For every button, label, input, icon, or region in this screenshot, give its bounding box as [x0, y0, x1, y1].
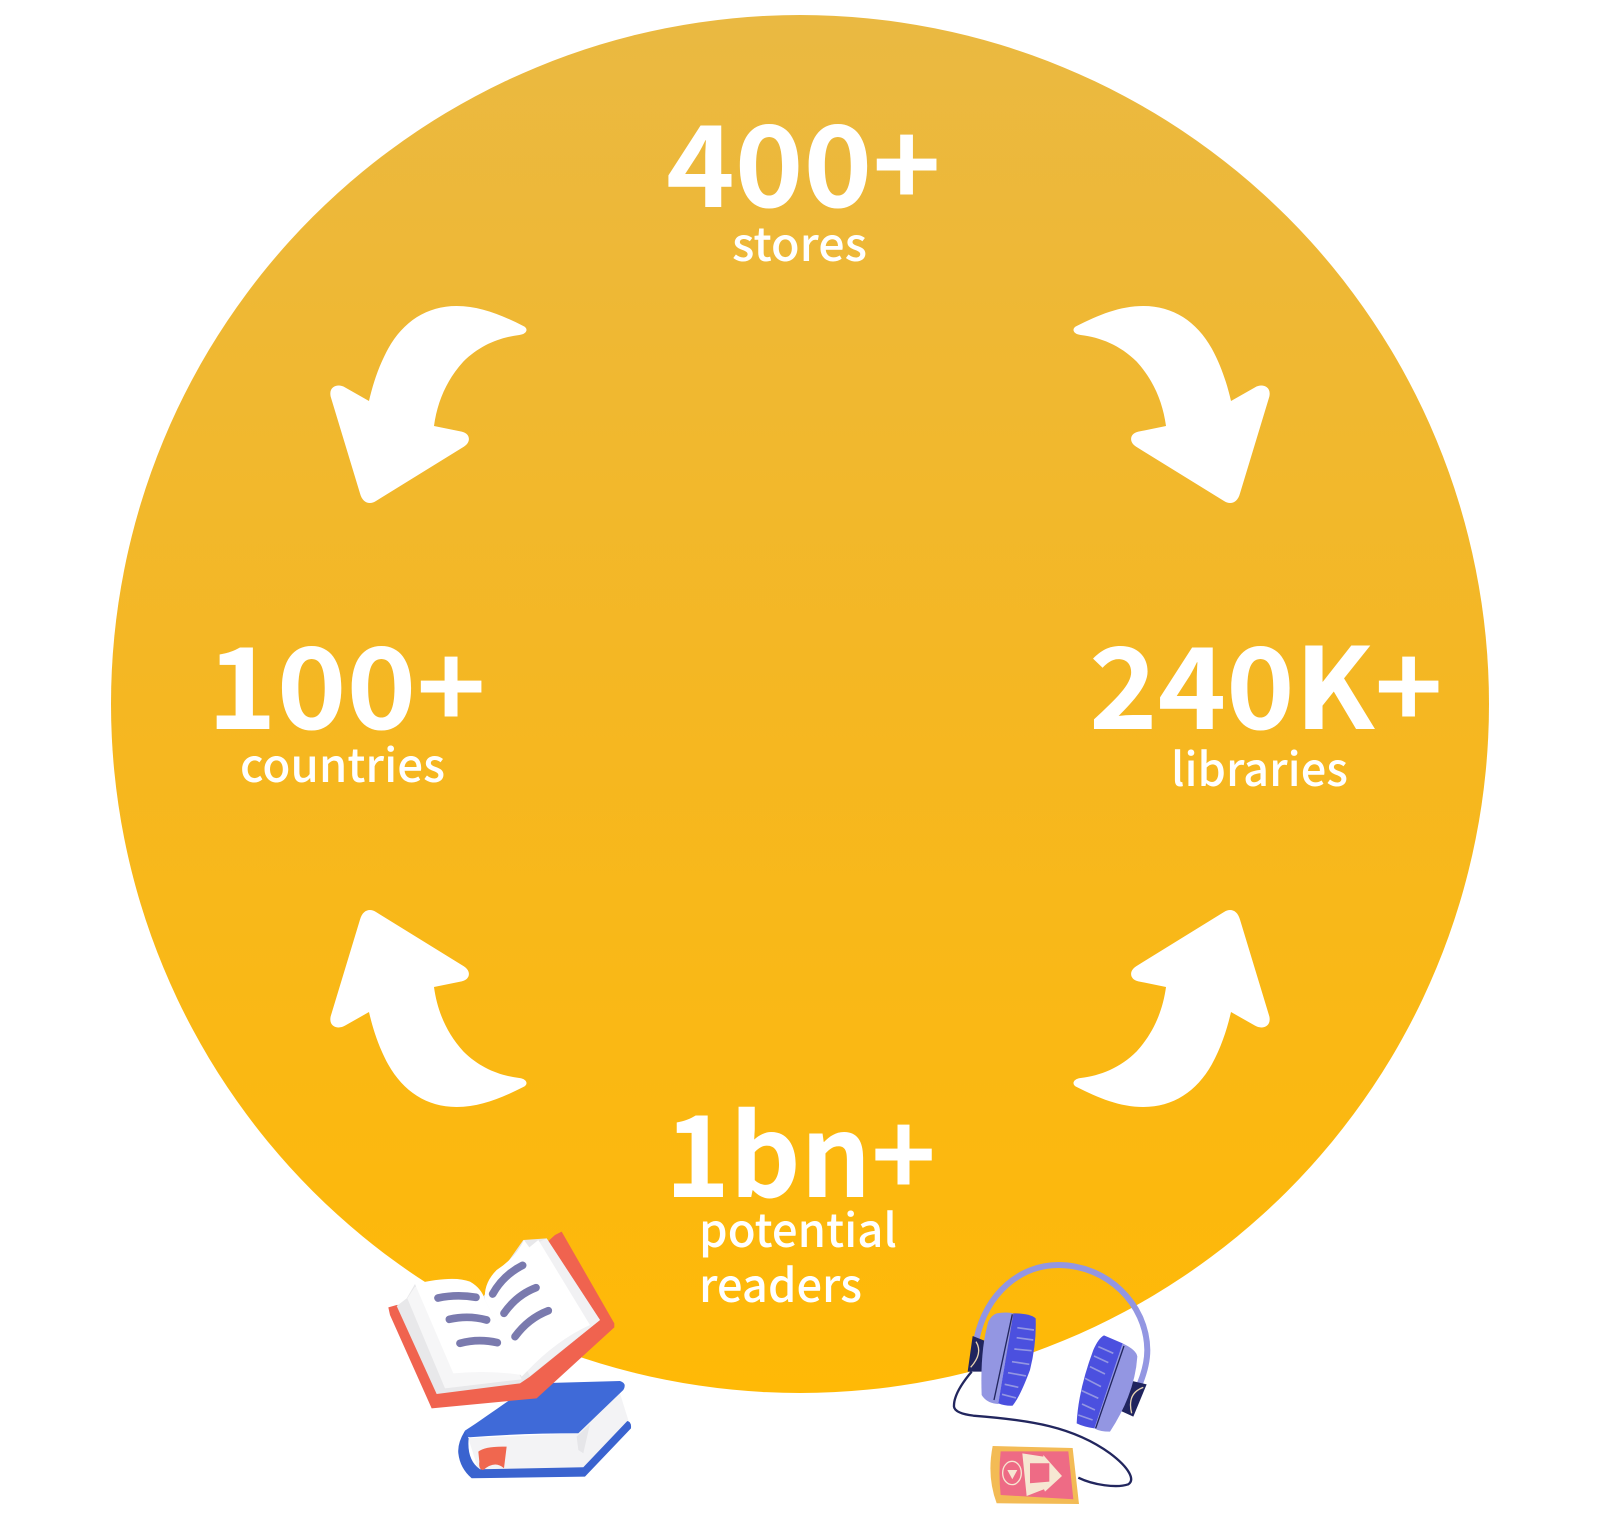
stat: 240K+ libraries: libraries	[1171, 734, 1348, 800]
yellow circle background	[111, 15, 1489, 1393]
music player	[990, 1446, 1079, 1504]
arrow: bottom right	[1073, 910, 1270, 1107]
stat: 100+ countries: 100+	[207, 598, 486, 762]
blue closed book	[458, 1381, 631, 1478]
stat: 400+ stores: stores	[732, 209, 867, 275]
left ear cup	[968, 1312, 1036, 1406]
red open book	[388, 1232, 614, 1408]
text lines on pages	[438, 1265, 548, 1343]
stat: 1bn+ potential readers	[665, 1066, 936, 1316]
icon: headphones with music player	[954, 1265, 1147, 1504]
stat: 1bn+ potential readers: potential	[699, 1195, 897, 1261]
arrow: top left	[330, 306, 527, 503]
stat: 400+ stores: 400+	[666, 76, 941, 240]
stat: 240K+ libraries: 240K+	[1089, 598, 1443, 762]
icon: stacked books	[388, 1232, 631, 1478]
stat: 1bn+ potential readers: readers	[699, 1250, 862, 1316]
arrow: top right	[1073, 306, 1270, 503]
stat: 100+ countries: countries	[240, 730, 445, 796]
cable	[954, 1372, 1131, 1486]
stat: 1bn+ potential readers: 1bn+	[665, 1066, 936, 1230]
headband	[977, 1265, 1147, 1383]
arrow: bottom left	[330, 910, 527, 1107]
right ear cup	[1077, 1335, 1147, 1432]
